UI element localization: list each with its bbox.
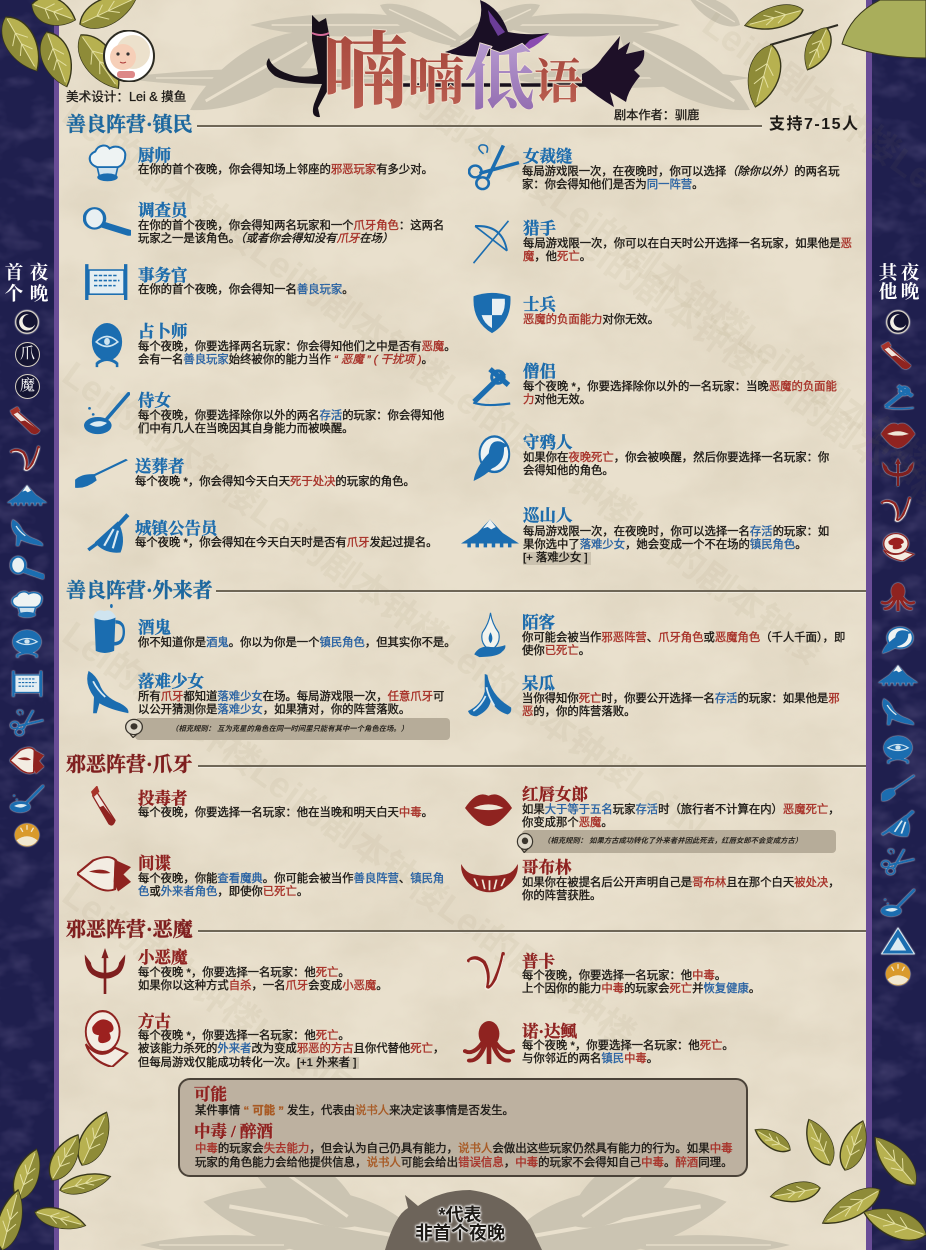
icon: spy bbox=[10, 747, 44, 775]
icon: puka bbox=[10, 446, 44, 474]
ability text: 在你的首个夜晚，你会得知一名善良玩家。 bbox=[138, 284, 354, 296]
icon: lips bbox=[881, 420, 915, 448]
icon: dusk moon bbox=[15, 310, 39, 334]
role name: 小恶魔 bbox=[138, 948, 188, 967]
icon: hand bell bbox=[87, 513, 130, 553]
icon: dawn sun bbox=[885, 961, 911, 987]
icon: toothy grin bbox=[460, 864, 519, 894]
rule note: （相克规则： 互为克星的角色在同一时间里只能有其中一个角色在场。） bbox=[171, 724, 408, 732]
illustrator credit: 美术设计：Lei & 摸鱼 bbox=[66, 90, 186, 104]
minion info marker bbox=[15, 342, 40, 367]
glossary text: 中毒 / 醉酒 bbox=[195, 1142, 733, 1170]
ability text bbox=[138, 218, 444, 244]
ability text: 会得知他的角色。 bbox=[523, 464, 614, 476]
setup tag: [+ 落难少女 ] bbox=[523, 552, 588, 564]
icon: mountain bbox=[461, 518, 519, 548]
sidebar heading: 夜 bbox=[30, 264, 48, 284]
icon: puka bbox=[881, 497, 915, 525]
navy side bands and parchment background: Lei的剧本钟楼Lei的剧本钟楼 bbox=[55, 873, 455, 1179]
ability text: 会有一名善良玩家始终被你的能力当作 “ 恶魔 ” ( 干扰项 )。 bbox=[138, 354, 433, 366]
glossary text: 中毒 / 醉酒: 中毒的玩家会失去能力，但会认为自己仍具有能力，说书人会做出这些玩家仍然具有能力的行为。如果中毒 bbox=[195, 1142, 733, 1154]
icon: fang gu bbox=[881, 533, 915, 561]
icon: banana peel bbox=[468, 674, 512, 718]
ability text: 但每局游戏仅能成功转化一次。[+1 外来者 ] bbox=[138, 1056, 356, 1068]
role: 小恶魔 bbox=[70, 947, 455, 995]
ability text: 家：你会得知他们是否为同一阵营。 bbox=[522, 178, 704, 190]
ability text bbox=[523, 236, 852, 262]
ability text bbox=[523, 526, 829, 552]
role: 间谍 bbox=[70, 853, 455, 899]
role: 落难少女 bbox=[70, 669, 455, 741]
ability text: 每个夜晚 *，你要选择一名玩家：他死亡。 bbox=[138, 1030, 350, 1042]
ability text bbox=[138, 408, 444, 434]
ability text bbox=[522, 165, 840, 190]
icon: spy mask bbox=[77, 856, 131, 893]
ability text: 每局游戏限一次，在夜晚时，你可以选择（除你以外）的两名玩 bbox=[522, 166, 840, 178]
icon: triangle bbox=[881, 927, 915, 955]
icon: snitch mountain bbox=[7, 484, 47, 506]
icon: witch hat bbox=[445, 0, 549, 57]
sidebar heading: 晚 bbox=[901, 283, 919, 303]
ability text: 上个因你的能力中毒的玩家会死亡并恢复健康。 bbox=[522, 982, 760, 994]
ability text: 每个夜晚 *，你要选择除你以外的一名玩家：当晚恶魔的负面能 bbox=[523, 380, 837, 392]
icon: rule note bbox=[515, 832, 535, 853]
role name: 调查员 bbox=[138, 201, 188, 220]
icon: glass slipper bbox=[85, 670, 130, 715]
ability text: 每个夜晚 *，你会得知今天白天死于处决的玩家的角色。 bbox=[135, 476, 415, 488]
ability text: 所有爪牙都知道落难少女在场。每局游戏限一次，任意爪牙可 bbox=[138, 690, 444, 702]
ability text bbox=[138, 872, 444, 898]
heading: demons: 邪恶阵营·恶魔 bbox=[66, 919, 193, 941]
role: 红唇女郎 bbox=[458, 785, 863, 855]
role name: 事务官 bbox=[138, 266, 188, 285]
icon: rosary cross bbox=[472, 367, 510, 406]
role name: 士兵 bbox=[523, 295, 556, 314]
role: 送葬者 bbox=[75, 457, 415, 488]
heading: minions: 邪恶阵营·爪牙 bbox=[66, 754, 193, 776]
icon: crystal ball bbox=[881, 736, 915, 764]
ability text: 玩家之一是该角色。（或者你会得知没有爪牙在场） bbox=[138, 232, 393, 244]
ability text bbox=[138, 1030, 444, 1070]
icon: chef hat bbox=[88, 144, 126, 182]
minion info marker: 爪 bbox=[20, 346, 35, 362]
icon: trident bbox=[83, 948, 127, 994]
ability text: 在你的首个夜晚，你会得知场上邻座的邪恶玩家有多少对。 bbox=[138, 164, 433, 176]
role name: 间谍 bbox=[138, 854, 171, 873]
ability text: 如果你在夜晚死亡，你会被唤醒，然后你要选择一名玩家：你 bbox=[523, 452, 829, 464]
icon: slipper bbox=[10, 519, 44, 547]
role: 占卜师 bbox=[92, 322, 456, 368]
role: 猎手 bbox=[473, 219, 852, 264]
icon: scissors bbox=[881, 848, 915, 876]
icon: shovel bbox=[881, 774, 915, 802]
icon: mop bbox=[10, 785, 44, 813]
role: 诺·达鲺 bbox=[458, 1020, 863, 1065]
role name: 巡山人 bbox=[523, 506, 572, 525]
role name: 呆瓜 bbox=[522, 674, 555, 693]
ability text: 如果大于等于五名玩家存活时（旅行者不计算在内）恶魔死亡， bbox=[522, 804, 840, 816]
role name: 陌客 bbox=[522, 613, 555, 632]
role name: 守鸦人 bbox=[523, 433, 572, 452]
role: 酒鬼 bbox=[70, 603, 455, 656]
ability text: 被该能力杀死的外来者改为变成邪恶的方古且你代替他死亡， bbox=[138, 1043, 444, 1055]
role name: 占卜师 bbox=[138, 322, 188, 341]
role: 城镇公告员 bbox=[87, 513, 438, 553]
footnote: *代表 bbox=[438, 1205, 482, 1225]
icon: raven bbox=[472, 434, 512, 482]
icon: magnifier bbox=[10, 556, 44, 580]
ability text: 每局游戏限一次，你可以在白天时公开选择一名玩家，如果他是恶 bbox=[523, 238, 852, 250]
role: 方古 bbox=[70, 1009, 455, 1069]
footnote bbox=[390, 1206, 530, 1242]
ability text: 每局游戏限一次，在夜晚时，你可以选择一名存活的玩家：如 bbox=[523, 526, 829, 538]
demon info marker: 魔 bbox=[20, 378, 35, 394]
heading: outsiders: 善良阵营·外来者 bbox=[66, 580, 213, 602]
icon: octopus bbox=[463, 1021, 515, 1064]
icon: scissors bbox=[468, 144, 520, 190]
ability text bbox=[522, 1040, 734, 1066]
sidebar heading: 其 bbox=[879, 264, 897, 284]
icon: crystal ball bbox=[92, 323, 122, 368]
icon: imp trident bbox=[881, 458, 915, 486]
role: 僧侣 bbox=[472, 362, 837, 406]
icon: scissors bbox=[10, 709, 44, 737]
role: 守鸦人 bbox=[474, 433, 829, 481]
bottom-left leaves bbox=[0, 1112, 112, 1250]
icon: rule note bbox=[123, 718, 145, 738]
player count: 支持7-15人 bbox=[769, 116, 860, 133]
script author credit: 剧本作者：驯鹿 bbox=[614, 108, 699, 122]
ability text: 每个夜晚，你要选择一名玩家：他在当晚和明天白天中毒。 bbox=[138, 806, 433, 818]
ability text bbox=[138, 966, 388, 992]
ability text: 每个夜晚，你要选择一名玩家：他中毒。 bbox=[522, 970, 726, 982]
icon: bell bbox=[881, 810, 915, 838]
ability text: 如果你在被提名后公开声明自己是哥布林且在那个白天被处决， bbox=[522, 876, 840, 888]
ability text bbox=[522, 876, 840, 902]
icon: mountain bbox=[878, 664, 918, 686]
role name: 酒鬼 bbox=[138, 618, 171, 637]
navy side bands and parchment background: Lei的剧本钟楼Lei的剧本钟楼Lei的剧本钟楼Lei的 bbox=[55, 353, 714, 847]
icon: fang gu bbox=[82, 1010, 129, 1067]
panel: rules glossary bbox=[178, 1078, 748, 1177]
icon: slipper bbox=[881, 698, 915, 726]
role: 调查员 bbox=[83, 201, 444, 244]
role name: 侍女 bbox=[138, 391, 171, 410]
title text: 喃 bbox=[407, 52, 465, 112]
top-left leaves bbox=[2, 0, 136, 90]
glossary heading: 中毒 / 醉酒: 中毒 / 醉酒 bbox=[194, 1122, 273, 1141]
icon: red lips bbox=[465, 790, 512, 826]
icon: beer mug bbox=[91, 604, 125, 655]
footnote: 非首个夜晚 bbox=[415, 1223, 505, 1243]
rule note bbox=[522, 830, 836, 853]
role name: 普卡 bbox=[522, 952, 555, 971]
role: 事务官 bbox=[85, 264, 354, 300]
role name: 城镇公告员 bbox=[135, 519, 218, 538]
ability text: 每个夜晚，你要选择除你以外的两名存活的玩家：你会得知他 bbox=[138, 410, 444, 422]
icon: mop bbox=[84, 392, 130, 434]
icon: black cat bbox=[267, 15, 332, 117]
role: 哥布林 bbox=[458, 858, 863, 904]
icon: priest bbox=[881, 382, 915, 410]
ability text: 力对他无效。 bbox=[523, 394, 591, 406]
role: 投毒者 bbox=[70, 785, 455, 828]
glossary heading: 可能: 可能 bbox=[194, 1085, 227, 1104]
ability text: 你可能会被当作邪恶阵营、爪牙角色或恶魔角色（千人千面），即 bbox=[522, 632, 845, 644]
navy side bands and parchment background: Lei的剧本钟楼Lei的剧本钟楼Lei的剧本钟楼Lei的剧本钟楼 bbox=[55, 93, 830, 672]
role: 普卡 bbox=[458, 951, 863, 996]
role: 陌客 bbox=[458, 611, 863, 659]
icon: poisoner bbox=[881, 342, 915, 370]
role name: 厨师 bbox=[138, 146, 171, 165]
icon: scroll bbox=[85, 264, 128, 300]
navy side bands and parchment background: Lei的剧本钟楼Lei的剧本钟楼Lei的剧本钟楼 bbox=[55, 613, 643, 1056]
ability text: 你变成那个恶魔。 bbox=[522, 816, 613, 828]
ability text: 与你邻近的两名镇民中毒。 bbox=[522, 1052, 658, 1064]
icon: chef bbox=[10, 590, 44, 618]
rule note: （相克规则： 如果方古成功转化了外来者并因此死去，红唇女郎不会变成方古） bbox=[543, 836, 802, 844]
icon: puka bbox=[467, 952, 510, 995]
ability text: 每个夜晚 *，你会得知在今天白天时是否有爪牙发起过提名。 bbox=[135, 536, 438, 548]
ability text: 恶魔的负面能力对你无效。 bbox=[523, 314, 659, 326]
ability text: 每个夜晚 *，你要选择一名玩家：他死亡。 bbox=[138, 966, 350, 978]
rule note bbox=[135, 718, 450, 740]
demon info marker bbox=[15, 374, 40, 399]
sidebar heading: 夜 bbox=[901, 264, 919, 284]
navy side bands and parchment background: Lei的剧本钟楼Lei的剧本钟楼Lei的剧本钟楼 bbox=[355, 43, 926, 486]
icon: poison vial bbox=[91, 786, 119, 827]
ability text: 每个夜晚 *，你要选择一名玩家：他死亡。 bbox=[522, 1040, 734, 1052]
ability text: 魔，他死亡。 bbox=[523, 250, 591, 262]
game title logo bbox=[266, 0, 644, 120]
icon: octopus bbox=[881, 583, 915, 611]
sidebar heading bbox=[0, 262, 54, 306]
icon: shield bbox=[473, 292, 510, 334]
glossary text: 可能: 某件事情 “ 可能 ” 发生，代表由说书人来决定该事情是否发生。 bbox=[195, 1104, 514, 1116]
role: 巡山人 bbox=[458, 505, 863, 565]
ability text bbox=[523, 452, 829, 478]
icon: poisoner bbox=[10, 407, 44, 435]
role: 士兵 bbox=[473, 292, 659, 334]
role name: 僧侣 bbox=[523, 362, 556, 381]
ability text bbox=[523, 380, 837, 406]
ability text: 色或外来者角色，即使你已死亡。 bbox=[138, 886, 308, 898]
role: 呆瓜 bbox=[458, 673, 863, 719]
role name: 哥布林 bbox=[522, 858, 572, 877]
ability text bbox=[522, 970, 760, 996]
icon: raven bbox=[881, 626, 915, 654]
ability text: 每个夜晚，你能查看魔典。你可能会被当作善良阵营、镇民角 bbox=[138, 872, 444, 884]
icon: scroll bbox=[10, 670, 44, 698]
icon: bow bbox=[473, 220, 509, 264]
role: 厨师 bbox=[88, 144, 433, 182]
ability text: 在你的首个夜晚，你会得知两名玩家和一个爪牙角色：这两名 bbox=[138, 220, 444, 232]
sidebar: first night order bbox=[0, 262, 54, 852]
role name: 落难少女 bbox=[138, 672, 204, 691]
icon: dawn sun bbox=[14, 822, 40, 848]
illustrator avatar bbox=[103, 30, 155, 82]
broom stick bbox=[400, 83, 590, 87]
sidebar heading: 个 bbox=[5, 285, 23, 305]
title text: 语 bbox=[534, 56, 582, 109]
heading: townsfolk: 善良阵营·镇民 bbox=[66, 114, 193, 136]
ability text: 们中有几人在当晚因其自身能力而被唤醒。 bbox=[138, 422, 354, 434]
role name: 送葬者 bbox=[135, 457, 184, 476]
title text bbox=[322, 27, 582, 120]
ability text bbox=[522, 692, 840, 718]
ability text bbox=[522, 804, 840, 830]
ability text bbox=[522, 632, 845, 658]
ability text: 当你得知你死亡时，你要公开选择一名存活的玩家：如果他是邪 bbox=[522, 692, 840, 704]
ability text: 你的阵营获胜。 bbox=[522, 890, 601, 902]
icon: crystal ball bbox=[10, 630, 44, 658]
sidebar: other nights order bbox=[872, 262, 926, 992]
ability text: 以公开猜测你是落难少女，如果猜对，你的阵营落败。 bbox=[138, 704, 410, 716]
role: 女裁缝 bbox=[468, 144, 840, 190]
role name: 方古 bbox=[138, 1012, 171, 1031]
icon: magnifier bbox=[83, 207, 131, 236]
role name: 诺·达鲺 bbox=[522, 1022, 577, 1041]
sidebar heading: 他 bbox=[879, 283, 897, 303]
icon: mop bbox=[881, 889, 915, 917]
top-right leaves and buds bbox=[744, 0, 926, 108]
title text: 低 bbox=[465, 42, 535, 119]
sidebar heading: 首 bbox=[5, 264, 23, 284]
ability text: 果你选中了落难少女，她会变成一个不在场的镇民角色。 bbox=[523, 538, 807, 550]
ability text bbox=[138, 690, 444, 716]
icon: witch broom bbox=[582, 36, 644, 107]
title text: 喃 bbox=[322, 27, 409, 120]
sidebar heading: 晚 bbox=[30, 285, 48, 305]
icon: dusk moon bbox=[886, 310, 910, 334]
role name: 投毒者 bbox=[138, 789, 188, 808]
ability text: 每个夜晚，你要选择两名玩家：你会得知他们之中是否有恶魔。 bbox=[138, 340, 456, 352]
glossary text: 中毒 / 醉酒: 玩家的角色能力会给他提供信息，说书人可能会给出错误信息，中毒的玩家不会得知自己中毒。醉酒同理。 bbox=[195, 1156, 733, 1168]
role: 侍女 bbox=[84, 391, 444, 434]
ability text: 如果你以这种方式自杀，一名爪牙会变成小恶魔。 bbox=[138, 980, 388, 992]
ability text bbox=[138, 340, 456, 366]
ability text: 恶的，你的阵营落败。 bbox=[522, 706, 635, 718]
icon: shovel bbox=[75, 458, 128, 488]
icon: oil lamp bbox=[472, 612, 509, 658]
bottom-right leaves bbox=[754, 1118, 926, 1241]
ability text: 你不知道你是酒鬼。你以为你是一个镇民角色，但其实你不是。 bbox=[138, 636, 456, 648]
role name: 红唇女郎 bbox=[522, 785, 588, 804]
sidebar heading bbox=[872, 262, 926, 306]
ability text: 使你已死亡。 bbox=[522, 644, 590, 656]
role name: 猎手 bbox=[523, 219, 556, 238]
role name: 女裁缝 bbox=[523, 147, 572, 166]
